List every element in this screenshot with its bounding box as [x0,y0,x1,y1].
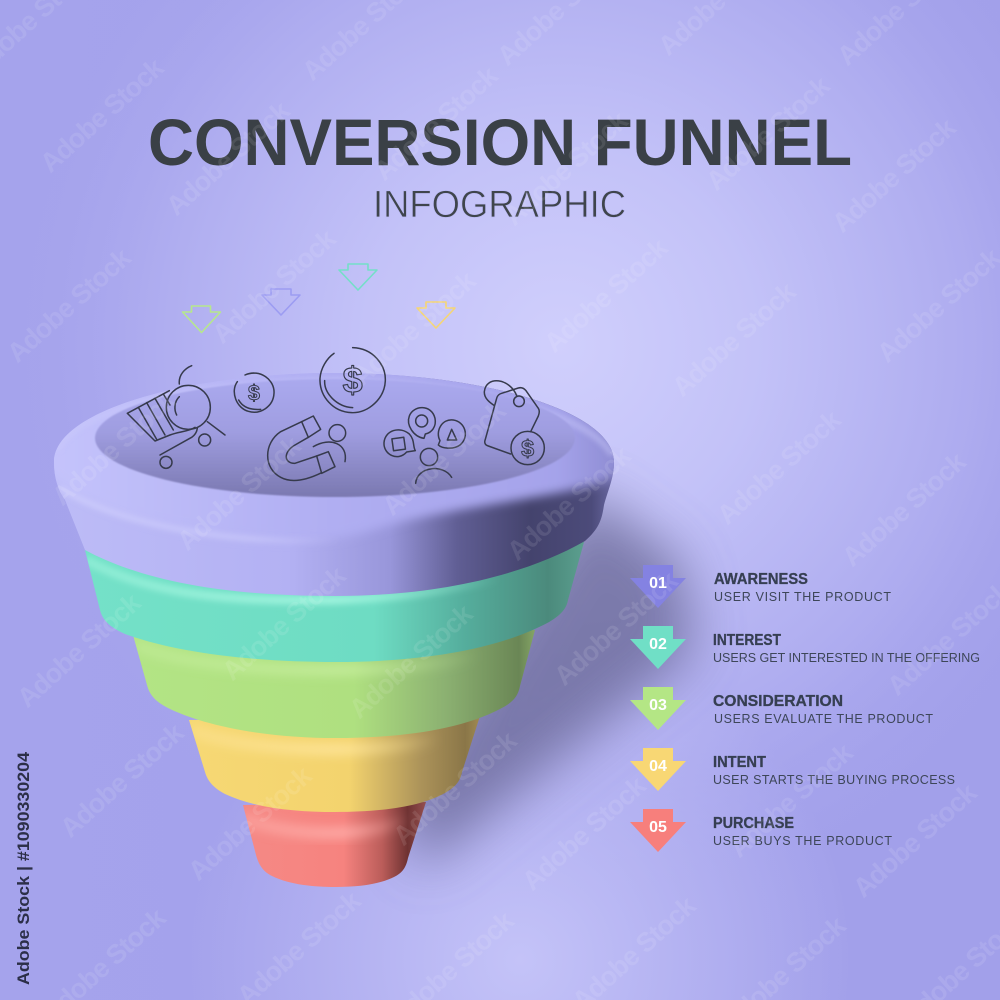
icon: small dollar coin: $ [248,381,260,405]
stock watermark: Adobe Stock [498,105,634,231]
title: CONVERSION FUNNEL [148,105,852,179]
stock watermark: Adobe Stock [171,430,307,556]
stock watermark: Adobe Stock [206,223,342,349]
legend item 4: intent: 04 [649,758,667,775]
legend item 3: consideration: USERS EVALUATE THE PRODUCT [714,712,933,726]
icon: large dollar coin [320,348,385,413]
legend item 3: consideration: 03 [649,697,667,714]
stock watermark: Adobe Stock [368,60,504,186]
legend item 4: intent: USER STARTS THE BUYING PROCESS [713,773,955,787]
stock watermark: Adobe Stock [343,598,479,724]
stock id label: Adobe Stock | #1090330204 [14,751,33,985]
legend item 5: purchase: PURCHASE [713,815,794,832]
funnel opening [95,379,575,497]
stock watermark: Adobe Stock [538,232,674,358]
legend item 2: interest: 02 [649,636,667,653]
icon: small dollar coin [234,373,274,412]
legend [630,565,980,852]
stock watermark: Adobe Stock [548,565,684,691]
funnel layer 1: awareness (purple rim) [54,373,614,596]
legend item 1: awareness: AWARENESS [714,571,808,588]
icon: large dollar coin: $ [343,360,363,401]
stock watermark: Adobe Stock [700,70,836,196]
legend item 2: interest [630,626,980,669]
stock watermark: Adobe Stock [723,737,859,863]
icon: speech bubbles and person [384,408,465,483]
legend item 2: interest: USERS GET INTERESTED IN THE OFFERING [713,651,980,665]
icon: magnet attracting person [268,416,346,480]
stock watermark: Adobe Stock [826,112,962,238]
subtitle: INFOGRAPHIC [373,184,626,226]
legend item 3: consideration: CONSIDERATION [713,693,843,710]
funnel layer 2: interest (teal) [85,542,584,662]
funnel drop shadow [400,490,695,870]
stock watermark: Adobe Stock [516,770,652,896]
stock watermark: Adobe Stock [216,560,352,686]
legend item 4: intent: INTENT [713,754,767,771]
stock watermark: Adobe Stock [1,242,137,368]
icons inside funnel [127,348,544,483]
stock watermark: Adobe Stock [34,52,170,178]
icon: shopping cart with magnifier [127,366,225,468]
funnel layer 5: purchase (red) [243,802,426,887]
legend item 5: purchase [630,809,892,852]
stock watermark: Adobe Stock [387,725,523,851]
falling arrows [182,264,455,332]
legend item 5: purchase: USER BUYS THE PRODUCT [713,834,892,848]
stock watermark: Adobe Stock [160,95,296,221]
stock watermark: Adobe Stock [11,587,147,713]
legend item 1: awareness [630,565,891,608]
stock watermark: Adobe Stock [711,404,847,530]
stock watermark: Adobe Stock [847,777,983,903]
stock watermark: Adobe Stock [346,265,482,391]
stock watermark: Adobe Stock [376,395,512,521]
stock watermark: Adobe Stock [836,446,972,572]
icon: price tag with dollar coin [484,381,544,465]
stock watermark: Adobe Stock [666,276,802,402]
funnel layer 4: intent (yellow) [189,716,480,812]
legend item 2: interest: INTEREST [713,632,781,649]
legend item 5: purchase: 05 [649,819,667,836]
funnel layer 3: consideration (lime) [133,630,535,738]
stock watermark: Adobe Stock [182,760,318,886]
legend item 1: awareness: 01 [649,575,667,592]
legend item 4: intent [630,748,955,791]
stock watermark: Adobe Stock [501,440,637,566]
legend item 1: awareness: USER VISIT THE PRODUCT [714,590,891,604]
funnel [54,373,614,887]
icon: price tag with dollar coin: $ [521,436,534,462]
stock watermark: Adobe Stock [54,717,190,843]
legend item 3: consideration [630,687,933,730]
stock watermark: Adobe Stock [46,385,182,511]
